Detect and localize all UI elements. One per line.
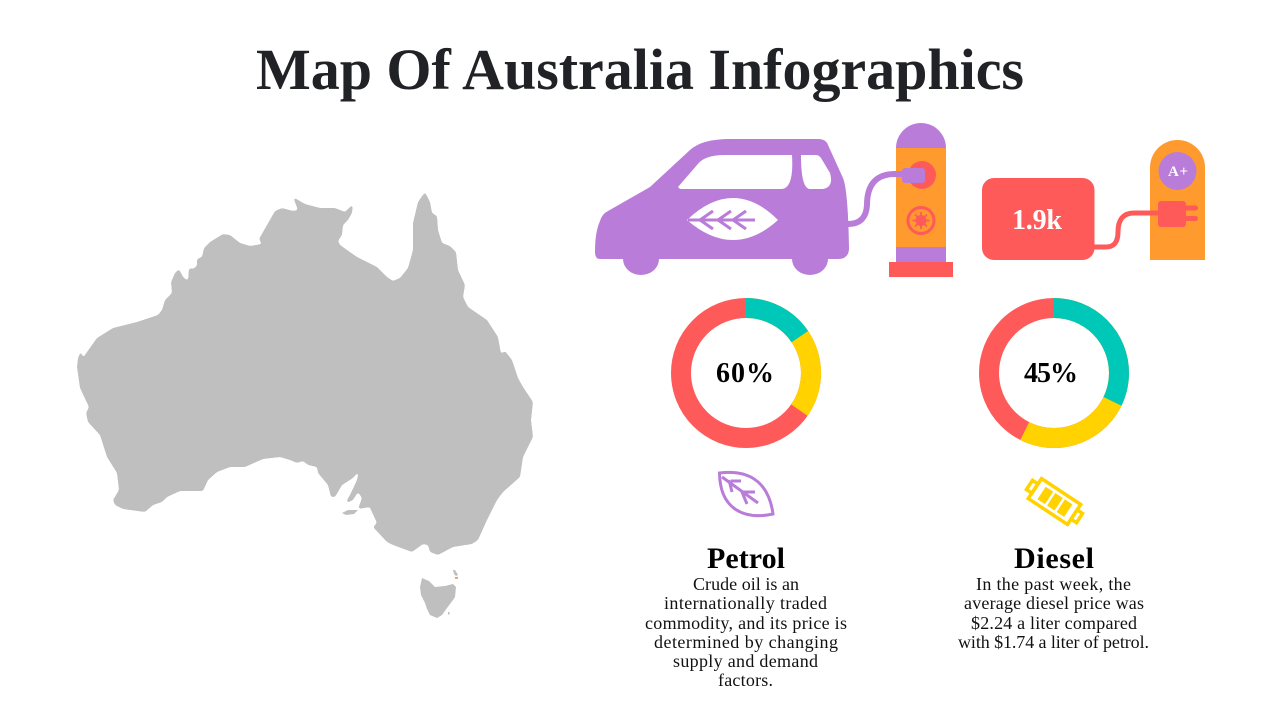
donut chart: diesel 45% xyxy=(989,308,1119,438)
diesel description: with $1.74 a liter of petrol. xyxy=(958,632,1149,652)
icon: leaf xyxy=(720,472,773,516)
text block: petrol xyxy=(645,542,847,690)
petrol description xyxy=(645,574,847,690)
heading: petrol: Petrol xyxy=(707,542,785,575)
diesel description: $2.24 a liter compared xyxy=(971,613,1137,633)
orange island marker xyxy=(455,577,458,579)
icon: battery xyxy=(1023,475,1086,528)
charger cable xyxy=(1094,213,1160,247)
orange charger xyxy=(1150,140,1205,260)
petrol description: supply and demand xyxy=(673,651,818,671)
diesel description xyxy=(958,574,1149,652)
A+ badge: A+ xyxy=(1168,164,1188,180)
mainland xyxy=(77,192,533,555)
petrol description: internationally traded xyxy=(664,593,827,613)
donut chart: petrol 60% xyxy=(681,308,811,438)
icon: battery box and charger xyxy=(982,140,1205,260)
charging pump xyxy=(889,123,953,277)
petrol description: commodity, and its price is xyxy=(645,613,847,633)
map of Australia xyxy=(77,192,533,618)
charge value box: 1.9k xyxy=(1012,205,1062,236)
diesel description: average diesel price was xyxy=(964,593,1144,613)
donut chart: petrol 60%: 60% xyxy=(716,358,774,389)
petrol description: determined by changing xyxy=(654,632,838,652)
heading: diesel: Diesel xyxy=(1014,542,1094,575)
petrol description: Crude oil is an xyxy=(693,574,799,594)
petrol description: factors. xyxy=(718,670,773,690)
plug xyxy=(1158,201,1198,227)
donut chart: diesel 45%: 45% xyxy=(1024,358,1078,389)
charging cable and plug xyxy=(848,168,925,224)
Tasmania xyxy=(420,578,456,618)
icon: purple electric car xyxy=(595,123,953,277)
A+ badge xyxy=(1158,152,1196,190)
car body xyxy=(595,139,849,275)
Kangaroo Island xyxy=(342,510,358,515)
car windows xyxy=(678,155,831,189)
diesel description: In the past week, the xyxy=(976,574,1131,594)
charge value box xyxy=(982,178,1094,260)
small islands xyxy=(448,570,458,614)
text block: diesel xyxy=(958,542,1149,652)
leaf emblem xyxy=(687,198,778,240)
title: Map Of Australia Infographics xyxy=(256,37,1024,102)
